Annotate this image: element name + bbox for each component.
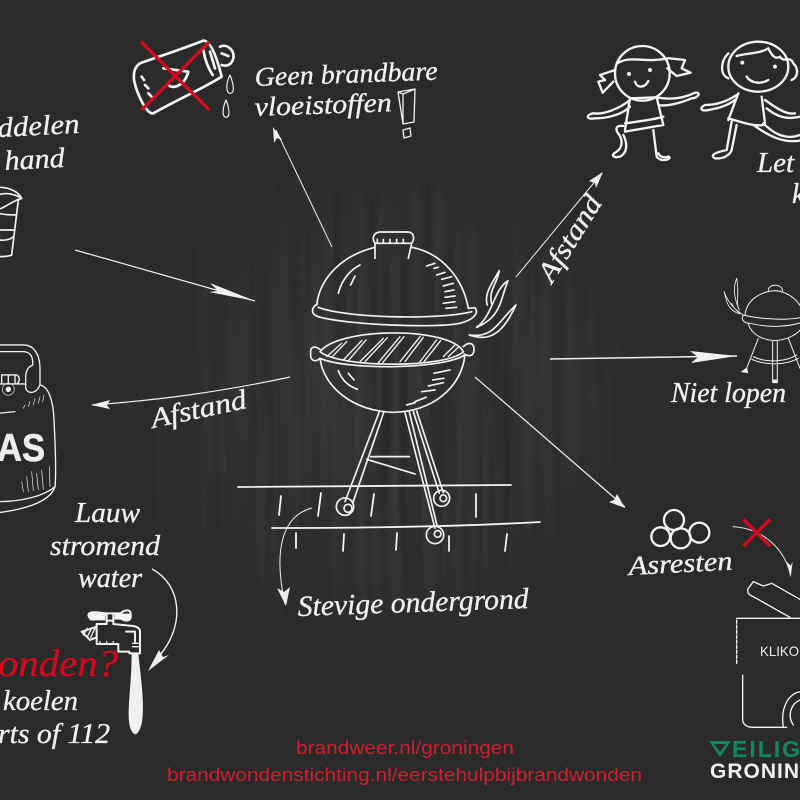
arrow: ash bin crossed out [733, 519, 793, 577]
text: Let op kinderen [756, 148, 800, 210]
text: koelen and huisarts of 112: rts of 112 [0, 719, 110, 750]
icon: flammable bottle crossed out [134, 41, 234, 117]
text: Geen brandbare vloeistoffen: vloeistoffen [254, 87, 392, 122]
arrow: distance to children [516, 172, 603, 277]
text: Geen brandbare vloeistoffen [254, 56, 438, 122]
text: koelen and huisarts of 112: koelen [3, 686, 78, 717]
arrow: distance to gas cylinder [91, 377, 290, 409]
icon: small barbecue with smoke [724, 278, 800, 383]
icon: central kettle barbecue [311, 232, 516, 544]
arrow: to tap water [148, 569, 177, 671]
text: website links: brandweer.nl/groningen [296, 738, 514, 758]
arrow: to flammable liquids [273, 127, 332, 247]
arrow: to firm ground [277, 508, 312, 606]
icon: ash balls [651, 510, 709, 548]
text: koelen and huisarts of 112 [0, 686, 110, 750]
text: Niet lopen: Niet lopen [670, 378, 786, 409]
text: Let op kinderen: Let [756, 148, 795, 179]
arrow: to barbecue from water bucket [75, 250, 255, 301]
icon: water tap [82, 610, 143, 734]
text: Geen brandbare vloeistoffen: Geen brandbare [254, 56, 438, 92]
text: Lauw stromend water: Lauw [74, 498, 140, 529]
text: website links [167, 738, 642, 785]
text: website links: brandwondenstichting.nl/eerstehulpbijbrandwonden [167, 765, 642, 785]
text: Afstand left: Afstand [146, 384, 250, 435]
arrow: to ash remains [475, 377, 625, 508]
icon: kliko waste bin [737, 582, 800, 727]
icon: exclamation mark [398, 89, 415, 138]
icon: water bucket [0, 187, 22, 257]
text: Stevige ondergrond: Stevige ondergrond [297, 583, 530, 623]
arrow: to small barbecue [550, 351, 737, 363]
text: Lauw stromend water: stromend [50, 531, 161, 562]
text: Afstand diagonal: Afstand [530, 189, 609, 290]
text: Middelen bij de hand: hand [4, 143, 66, 177]
logo: Veilig Groningen [709, 736, 800, 783]
text: Lauw stromend water: water [78, 563, 142, 594]
icon: gas cylinder [0, 345, 56, 513]
icon: two children playing [588, 42, 800, 160]
ground lines [238, 485, 540, 551]
text: Middelen bij de hand [0, 109, 80, 177]
text: Lauw stromend water [50, 498, 161, 594]
text: Brandwonden heading: onden? [0, 643, 118, 685]
text: Asresten: Asresten [625, 546, 733, 581]
